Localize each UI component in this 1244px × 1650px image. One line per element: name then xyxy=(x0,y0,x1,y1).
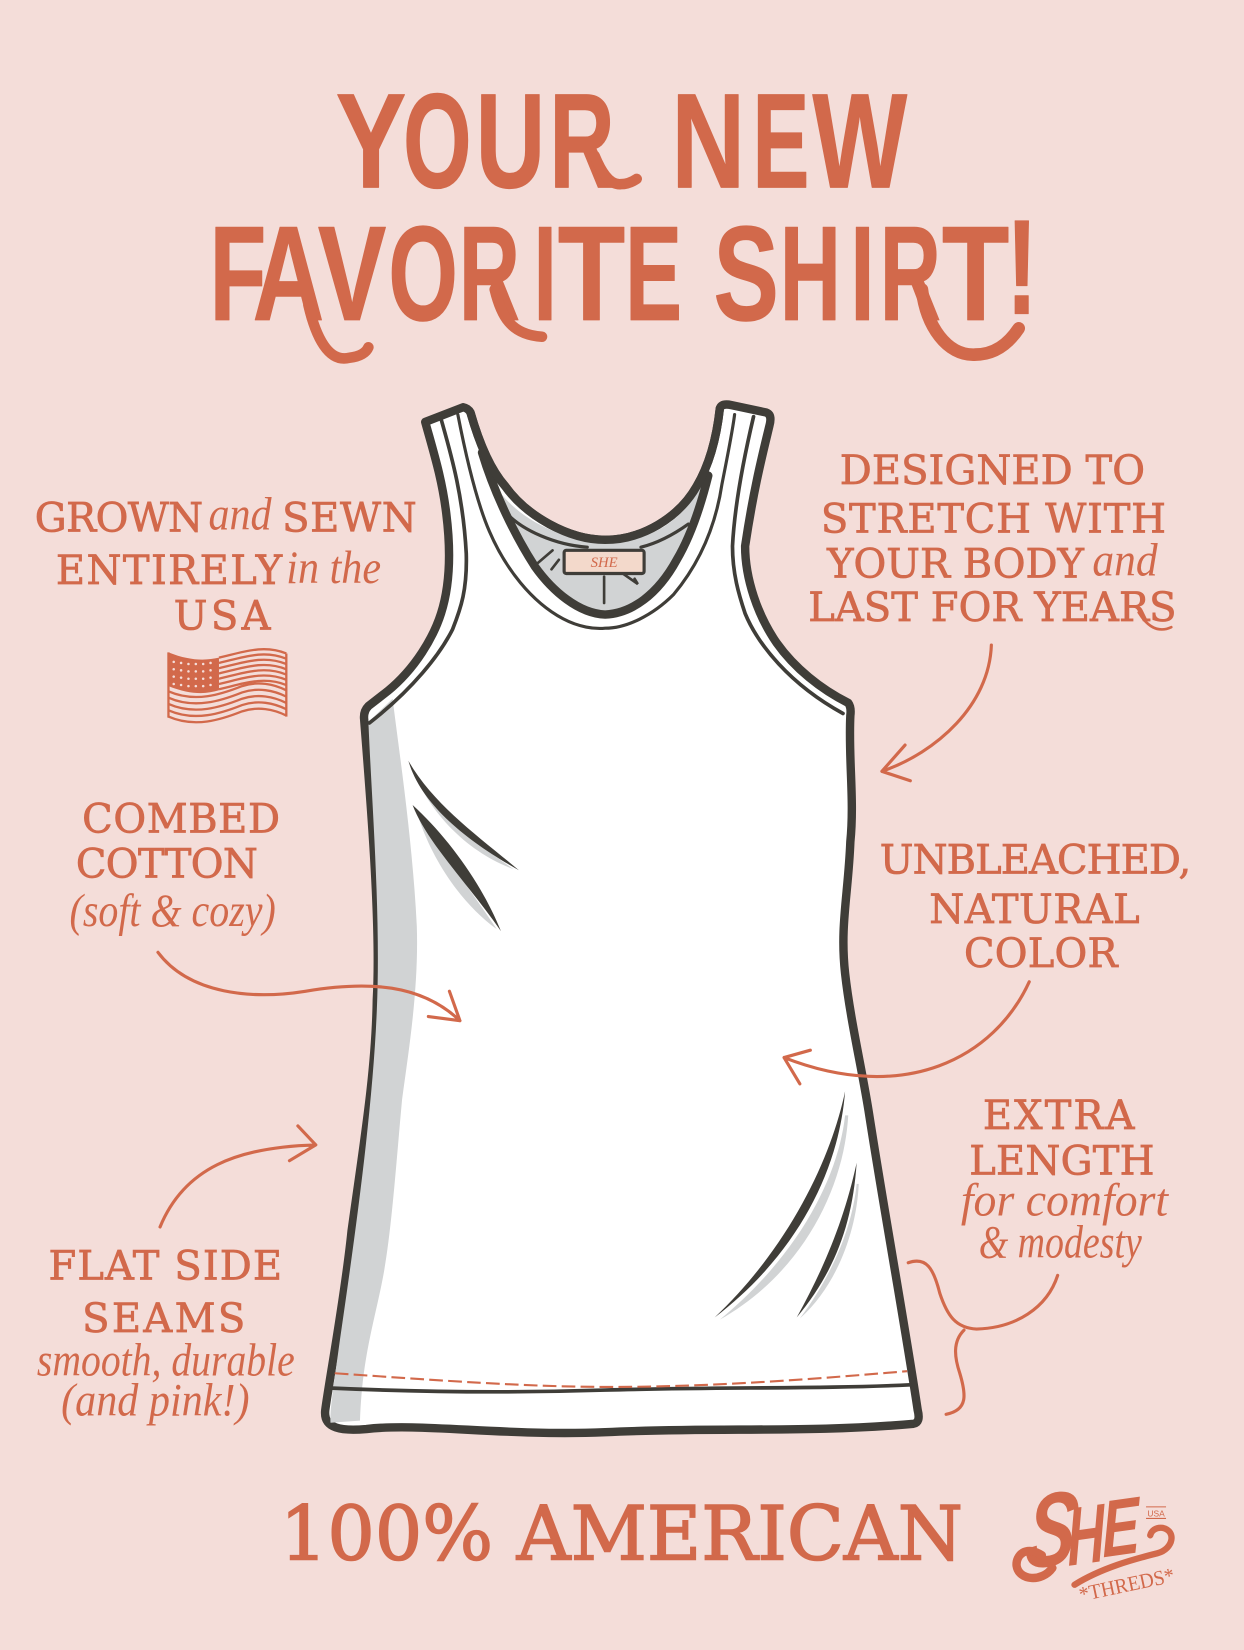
title: Y xyxy=(336,65,406,216)
label: flat side seams xyxy=(37,1244,295,1426)
shirt illustration xyxy=(325,405,919,1433)
stitching xyxy=(335,1371,907,1387)
title: R xyxy=(459,198,520,349)
bracket: extra length xyxy=(908,1261,1058,1414)
title: I xyxy=(850,198,875,349)
label: designed to stretch: and xyxy=(1092,536,1158,587)
title: O xyxy=(403,65,472,216)
arrow: combed cotton xyxy=(158,952,460,1021)
icon: american flag xyxy=(168,649,286,722)
lower wrinkles xyxy=(715,1091,859,1320)
label: combed cotton: (soft & cozy) xyxy=(70,886,276,937)
label: combed cotton: COMBED xyxy=(82,796,280,842)
neck back grey xyxy=(486,468,707,612)
label: grown and sewn xyxy=(35,489,417,639)
title: R xyxy=(880,198,941,349)
title: ! xyxy=(1006,192,1038,343)
title: E xyxy=(625,198,682,349)
arrow: flat side seams xyxy=(160,1126,316,1227)
arrow: unbleached xyxy=(784,982,1029,1084)
title: E xyxy=(752,65,809,216)
label: flat side seams: (and pink!) xyxy=(61,1375,249,1426)
label: extra length: for comfort xyxy=(961,1175,1169,1226)
title: O xyxy=(388,198,458,349)
logo: she threds: USA xyxy=(1147,1508,1165,1518)
title: S xyxy=(714,198,779,349)
title: R xyxy=(549,65,615,216)
neck tag: SHE xyxy=(591,555,618,571)
label: designed to stretch: LAST FOR YEARS xyxy=(808,585,1177,631)
neck outer seam xyxy=(458,415,735,628)
label: flat side seams: smooth, durable xyxy=(37,1335,295,1386)
logo: she threds xyxy=(1017,1469,1177,1606)
label: combed cotton: COTTON xyxy=(76,842,258,888)
neck tag xyxy=(538,550,644,603)
title: F xyxy=(210,198,266,349)
upper wrinkles xyxy=(408,761,519,931)
back neck edge xyxy=(470,408,720,540)
front neckline xyxy=(482,452,708,615)
label: unbleached natural color: COLOR xyxy=(964,931,1120,977)
label: designed to stretch xyxy=(808,448,1177,631)
logo: she threds: S xyxy=(1021,1469,1083,1591)
label: grown and sewn: USA xyxy=(174,593,272,639)
side seam shadow xyxy=(330,699,417,1423)
title: I xyxy=(534,198,557,349)
label: unbleached natural color: UNBLEACHED, xyxy=(880,837,1191,883)
label: extra length: EXTRA xyxy=(983,1093,1136,1139)
logo: she threds: H xyxy=(1066,1486,1107,1584)
title: N xyxy=(671,65,745,216)
footer text: 100% AMERICAN xyxy=(280,1491,963,1578)
label: grown and sewn: in the xyxy=(286,543,381,594)
arrow: designed to stretch xyxy=(882,645,991,781)
label: extra length: LENGTH xyxy=(969,1138,1154,1184)
label: grown and sewn: SEWN xyxy=(282,495,417,541)
title: T xyxy=(558,198,625,349)
label: flat side seams: SEAMS xyxy=(82,1296,245,1342)
armhole seams xyxy=(369,417,843,723)
label: extra length: & modesty xyxy=(979,1217,1142,1268)
title: W xyxy=(812,65,907,216)
label: flat side seams: FLAT SIDE xyxy=(48,1244,282,1290)
logo: she threds: E xyxy=(1100,1479,1143,1574)
title xyxy=(210,65,1038,358)
title: U xyxy=(476,65,545,216)
label: combed cotton xyxy=(70,796,280,937)
title: A xyxy=(253,198,324,349)
hem seam xyxy=(329,1385,910,1392)
title: V xyxy=(318,198,386,349)
label: designed to stretch: DESIGNED TO xyxy=(840,448,1145,494)
label: designed to stretch: YOUR BODY xyxy=(826,542,1085,588)
title: H xyxy=(780,198,841,349)
label: grown and sewn: GROWN xyxy=(35,495,203,541)
logo: she threds: *THREDS* xyxy=(1077,1563,1177,1606)
label: unbleached natural color xyxy=(880,837,1191,977)
label: grown and sewn: ENTIRELY xyxy=(56,548,283,594)
back neck thin line xyxy=(503,509,688,547)
label: designed to stretch: STRETCH WITH xyxy=(821,496,1166,542)
title: T xyxy=(942,198,1009,349)
label: unbleached natural color: NATURAL xyxy=(929,887,1140,933)
shirt body xyxy=(325,405,919,1433)
label: grown and sewn: and xyxy=(208,489,272,540)
label: extra length xyxy=(961,1093,1169,1268)
